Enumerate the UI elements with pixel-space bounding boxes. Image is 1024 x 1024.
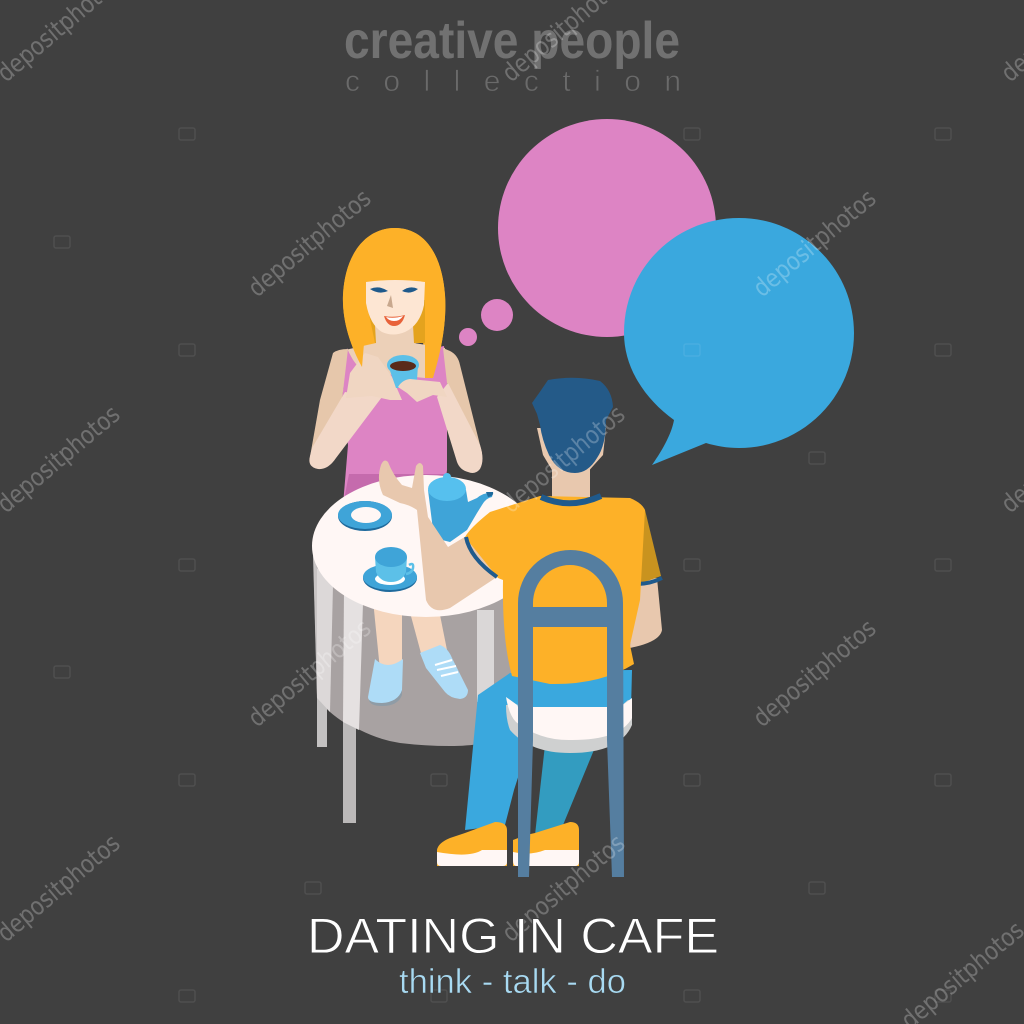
watermarks: depositphotos <box>496 828 631 948</box>
cloth strip right <box>477 610 494 702</box>
pink dress <box>342 346 447 505</box>
sleeve cuff right <box>637 578 662 584</box>
right leg <box>535 745 596 835</box>
speech bubble: pink <box>498 119 716 337</box>
waist <box>510 670 632 707</box>
brand logo: creative people collection: creative people <box>344 12 680 70</box>
hair shadow <box>366 300 425 343</box>
left leg <box>465 670 632 830</box>
stool seat <box>506 697 632 753</box>
left upper arm <box>310 349 348 457</box>
cloth strip one <box>317 568 333 712</box>
watermarks: depositphotos <box>242 183 377 303</box>
ears <box>537 428 606 475</box>
subtitle: think - talk - do <box>399 963 626 1001</box>
neck <box>552 465 590 497</box>
torso skin <box>345 325 445 400</box>
mouth <box>384 315 405 326</box>
watermark camera icons <box>54 128 951 1002</box>
cloth strip left edge <box>313 555 317 698</box>
thought dot: small <box>459 328 477 346</box>
sleeve cuff left <box>466 537 497 577</box>
right hand <box>398 379 447 402</box>
dress lower band <box>343 474 446 505</box>
right shoe <box>513 822 579 866</box>
teapot <box>428 473 493 542</box>
right leg <box>408 605 447 657</box>
right shoe <box>420 645 468 699</box>
collar <box>541 496 601 503</box>
left shoe <box>368 659 403 706</box>
title: DATING IN CAFE <box>307 908 719 964</box>
yellow t-shirt <box>465 496 645 684</box>
left eye <box>370 287 388 293</box>
cloth strip two <box>343 590 363 730</box>
watermarks: depositphotos <box>747 613 882 733</box>
man <box>379 378 662 877</box>
left hand <box>346 353 402 400</box>
watermarks: depositphotos <box>747 183 882 303</box>
brand logo: creative people collection <box>344 12 681 98</box>
table top <box>312 475 540 617</box>
front left table leg <box>343 720 356 823</box>
left shoe <box>437 822 507 866</box>
right eye <box>402 287 418 293</box>
table cylinder <box>313 546 540 746</box>
hair back <box>343 228 445 378</box>
woman's legs and shoes <box>368 600 468 706</box>
brand logo: creative people collection: collection <box>345 65 681 98</box>
left forearm <box>309 392 382 469</box>
nose <box>387 295 393 308</box>
table base <box>313 546 540 823</box>
speech bubble: blue <box>624 218 854 465</box>
back left table leg <box>317 640 327 747</box>
watermarks: depositphotos <box>496 399 631 519</box>
cup in woman's hand <box>387 355 419 388</box>
right forearm <box>437 383 482 473</box>
watermarks: depositphotos <box>242 613 377 733</box>
plate <box>338 501 392 531</box>
face <box>366 280 425 334</box>
man's left arm and hand <box>379 461 497 610</box>
dark sleeve <box>630 510 661 585</box>
cup and saucer <box>363 547 417 592</box>
man's hair <box>532 378 613 473</box>
woman <box>309 228 482 505</box>
right upper arm <box>443 348 482 455</box>
thought dot: large <box>481 299 513 331</box>
left leg <box>373 600 402 670</box>
chair frame <box>518 550 624 877</box>
man's right arm <box>630 578 662 648</box>
hair front <box>343 228 445 378</box>
